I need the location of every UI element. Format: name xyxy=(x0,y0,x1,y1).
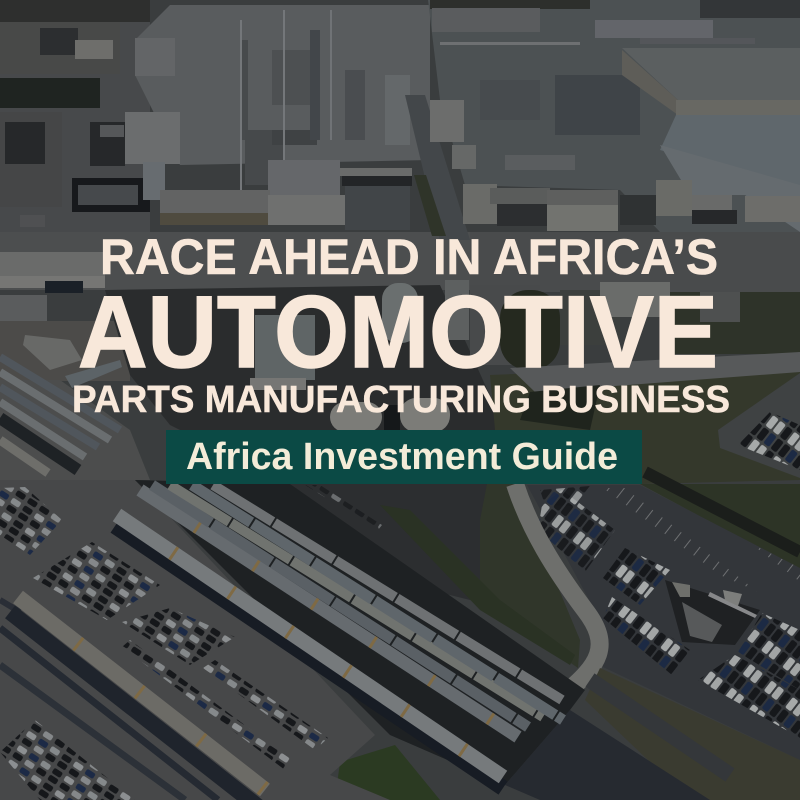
right green area xyxy=(490,352,800,484)
top-left yard xyxy=(0,0,150,250)
factory left block xyxy=(125,5,430,230)
title line 1: RACE AHEAD IN AFRICA’S xyxy=(100,229,718,285)
lower-right parking lot xyxy=(527,472,800,760)
curved road xyxy=(515,484,600,695)
guide badge xyxy=(166,430,642,484)
utility buildings and domes xyxy=(250,232,800,432)
parked cars xyxy=(0,485,382,800)
central dark lot xyxy=(105,285,510,480)
title xyxy=(72,229,730,421)
central access road xyxy=(0,95,470,290)
title line 2: AUTOMOTIVE xyxy=(78,275,718,389)
central lower lot xyxy=(290,484,510,610)
freight trains xyxy=(0,357,563,790)
badge label: Africa Investment Guide xyxy=(186,436,618,478)
sales pavilion xyxy=(665,580,760,645)
green verge beside road xyxy=(480,484,580,668)
mid-left buildings xyxy=(0,252,150,480)
rail yard xyxy=(0,357,710,800)
strip below lot xyxy=(335,668,800,800)
factory right block xyxy=(428,0,800,258)
title line 3: PARTS MANUFACTURING BUSINESS xyxy=(72,379,730,421)
bottom-left concrete lot xyxy=(0,480,390,800)
